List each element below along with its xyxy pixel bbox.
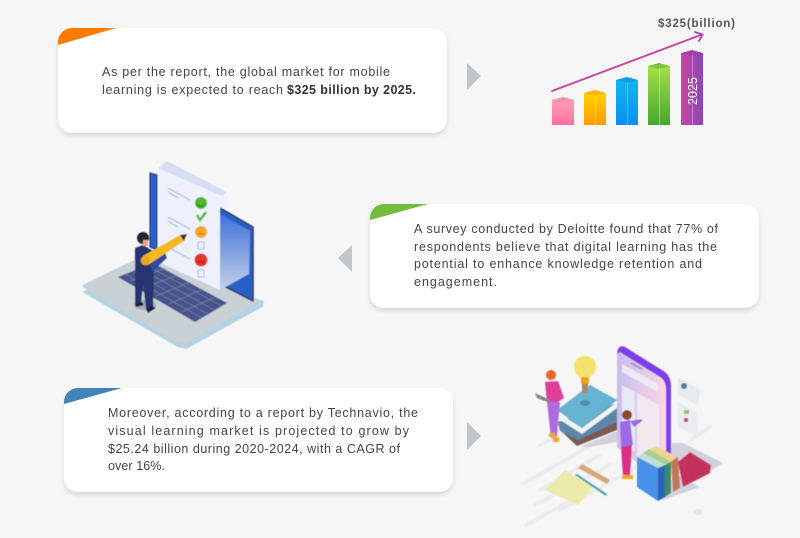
- pen: [575, 474, 607, 496]
- bar 1: [552, 97, 574, 125]
- chart label: $325(billion): [658, 18, 735, 30]
- orange corner accent: [58, 28, 116, 45]
- icon: empty box 2: [198, 270, 204, 277]
- panel: Deloitte survey card: [362, 196, 759, 308]
- laptop base: [84, 254, 263, 348]
- survey paper: [158, 161, 228, 290]
- laptop screen: [150, 173, 253, 301]
- light bulb: [574, 356, 596, 393]
- woman reading: [535, 370, 564, 442]
- text: Technavio report: visual learning market is projected to grow by: [108, 424, 410, 438]
- bar 2: [584, 90, 606, 125]
- text: Technavio report: over 16%.: [108, 459, 165, 473]
- blue corner accent: [64, 388, 122, 404]
- bar 4: [648, 63, 670, 125]
- text: Deloitte survey: potential to enhance knowledge retention and: [414, 257, 702, 271]
- text: Deloitte survey: respondents believe that digital learning has the: [414, 240, 717, 254]
- text: Deloitte survey: [414, 222, 719, 289]
- panel: Technavio report card: [56, 380, 453, 492]
- text: Deloitte survey: engagement.: [414, 275, 497, 289]
- icon: empty box 1: [198, 242, 204, 249]
- text: market forecast: learning is expected to reach: [102, 83, 283, 97]
- text: Deloitte survey: A survey conducted by Deloitte found that 77% of: [414, 222, 719, 236]
- bar chart: market growth to 2025: [552, 18, 735, 125]
- notepad: [545, 470, 593, 505]
- text: market forecast: [102, 65, 416, 97]
- man at phone: [620, 410, 642, 479]
- pencil: [141, 234, 187, 265]
- small floor spot: [693, 509, 703, 515]
- survey text lines: [168, 188, 190, 259]
- bar 3: [616, 77, 638, 125]
- icon: check mark: [197, 212, 206, 220]
- arrow: left to laptop: [338, 245, 352, 272]
- illustration: laptop survey: [84, 161, 263, 348]
- year label: 2025: [686, 77, 700, 105]
- smartphone: [617, 346, 671, 462]
- upright books: [637, 446, 680, 501]
- panel: market forecast card: [50, 20, 447, 133]
- arrow: right to chart: [467, 63, 481, 90]
- icon: orange face: [195, 226, 207, 238]
- text: market forecast: $325 billion by 2025.: [287, 83, 416, 97]
- text: Technavio report: [108, 406, 418, 473]
- red book: [678, 452, 711, 487]
- ruler: [578, 464, 610, 484]
- book and phone shadows: [580, 431, 723, 500]
- bar 5 with year: [681, 50, 703, 125]
- text: Technavio report: Moreover, according to a report by Technavio, the: [108, 406, 418, 420]
- green corner accent: [370, 204, 428, 220]
- stacked books: [557, 385, 617, 446]
- paper cards: [678, 377, 700, 438]
- floor stripes: [524, 425, 710, 525]
- growth arrow: [552, 32, 702, 91]
- keyboard: [118, 263, 227, 322]
- text: Technavio report: $25.24 billion during 2020-2024, with a CAGR of: [108, 442, 401, 456]
- illustration: mobile learning scene: [524, 346, 723, 525]
- arrow: right to learning scene: [467, 422, 481, 450]
- icon: red face: [194, 254, 208, 266]
- text: market forecast: As per the report, the global market for mobile: [102, 65, 390, 79]
- icon: green smile: [195, 197, 207, 209]
- man with pencil: [134, 232, 187, 313]
